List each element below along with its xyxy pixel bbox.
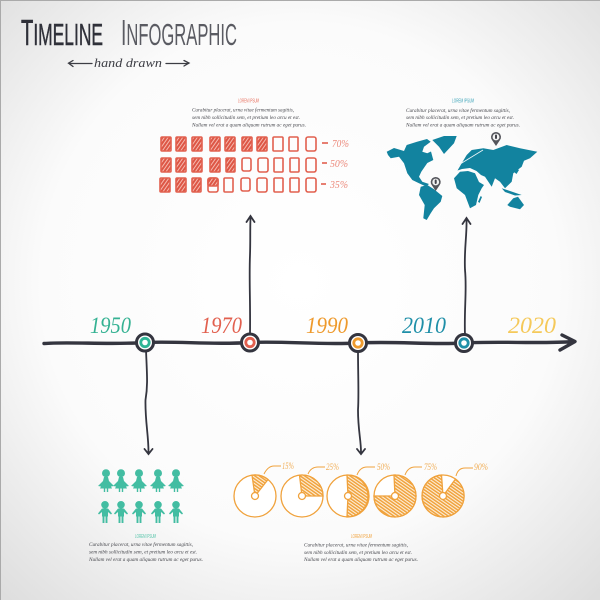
pin: asia (491, 132, 501, 146)
text block: map panel: Curabitur placerat, urna vitae fermentum sagittis, (406, 107, 511, 114)
chart: hatched percentage rows (160, 137, 349, 192)
row: 70%: 70% (332, 138, 349, 150)
row: 35% (160, 178, 348, 192)
pie: 15%: 15% (282, 461, 294, 471)
timeline node: 1950 (136, 334, 154, 351)
text block: pies panel: Curabitur placerat, urna vitae fermentum sagittis, (304, 542, 409, 548)
text block: map panel (405, 98, 520, 128)
africa (454, 171, 484, 208)
row: 50% (161, 158, 348, 172)
people pictogram (98, 469, 184, 523)
year: 1990: 1990 (306, 313, 348, 338)
pin: south america (431, 177, 441, 191)
row: 35%: 35% (329, 179, 348, 191)
pie: 75% (374, 462, 437, 517)
pie: 75%: 75% (424, 462, 437, 472)
pie: 50% (327, 462, 390, 517)
russia highlight line (458, 150, 483, 165)
connector arrow: 1950 down (144, 350, 152, 454)
year: 1970: 1970 (201, 313, 242, 338)
text block: red panel (191, 98, 306, 128)
text block: people panel: LOREM IPSUM (135, 534, 156, 540)
text block: red panel: Nullam vel erat a quam aliquam rutrum ac eget purus. (191, 122, 306, 128)
row: 50%: 50% (330, 158, 348, 170)
north america (387, 139, 433, 186)
connector arrow: 1970 up (246, 216, 254, 335)
year: 2020: 2020 (508, 313, 557, 338)
greenland (432, 136, 457, 154)
pie charts (234, 461, 488, 517)
year: 1950: 1950 (90, 313, 131, 338)
south america (419, 185, 442, 220)
pie: 90%: 90% (474, 462, 488, 472)
row: men (98, 501, 183, 523)
connector arrow: 1990 down (357, 350, 365, 454)
title (21, 12, 237, 53)
text block: red panel: LOREM IPSUM (238, 98, 259, 104)
connector arrow: 2010 up (462, 218, 470, 335)
text block: people panel (88, 534, 203, 563)
madagascar (478, 196, 482, 203)
timeline axis with arrow (44, 335, 575, 350)
text block: people panel: Curabitur placerat, urna vitae fermentum sagittis, (89, 541, 194, 548)
pie: 50%: 50% (377, 462, 390, 472)
text block: pies panel (303, 534, 418, 563)
timeline node: 1990 (350, 334, 366, 352)
row: women (98, 469, 184, 492)
subtitle: hand drawn with arrows (68, 55, 189, 70)
text block: pies panel: Nullam vel erat a quam aliquam rutrum ac eget purus. (303, 557, 418, 563)
pie: 90% (422, 462, 488, 517)
timeline node: 2010 (456, 334, 472, 352)
text block: map panel: sem nibh sollicitudin sem, et pretium leo arcu et est. (406, 115, 514, 121)
australia (507, 197, 524, 209)
pie: 15% (234, 461, 294, 517)
title: TIMELINE (21, 12, 103, 53)
japan (514, 168, 519, 174)
pie: 25%: 25% (326, 462, 339, 472)
text block: red panel: Curabitur placerat, urna vitae fermentum sagittis, (192, 106, 295, 114)
indonesia (502, 188, 522, 196)
text block: pies panel: sem nibh sollicitudin sem, et pretium leo arcu et est. (304, 550, 412, 556)
text block: people panel: sem nibh sollicitudin sem, et pretium leo arcu et est. (89, 550, 197, 556)
text block: red panel: sem nibh sollicitudin sem, et pretium leo arcu et est. (192, 115, 300, 121)
world map (387, 132, 537, 220)
title: INFOGRAPHIC (121, 12, 237, 53)
text block: people panel: Nullam vel erat a quam aliquam rutrum ac eget purus. (88, 557, 203, 563)
text block: map panel: LOREM IPSUM (452, 98, 474, 104)
text block: map panel: Nullam vel erat a quam aliquam rutrum ac eget purus. (405, 122, 520, 128)
text block: pies panel: LOREM IPSUM (351, 534, 372, 540)
row: 70% (161, 137, 349, 151)
pie: 25% (281, 462, 339, 517)
year: 2010: 2010 (402, 313, 446, 338)
subtitle: hand drawn with arrows: hand drawn (94, 55, 162, 70)
timeline node: 1970 (242, 334, 258, 351)
year labels (90, 313, 557, 338)
eurasia (458, 145, 537, 188)
